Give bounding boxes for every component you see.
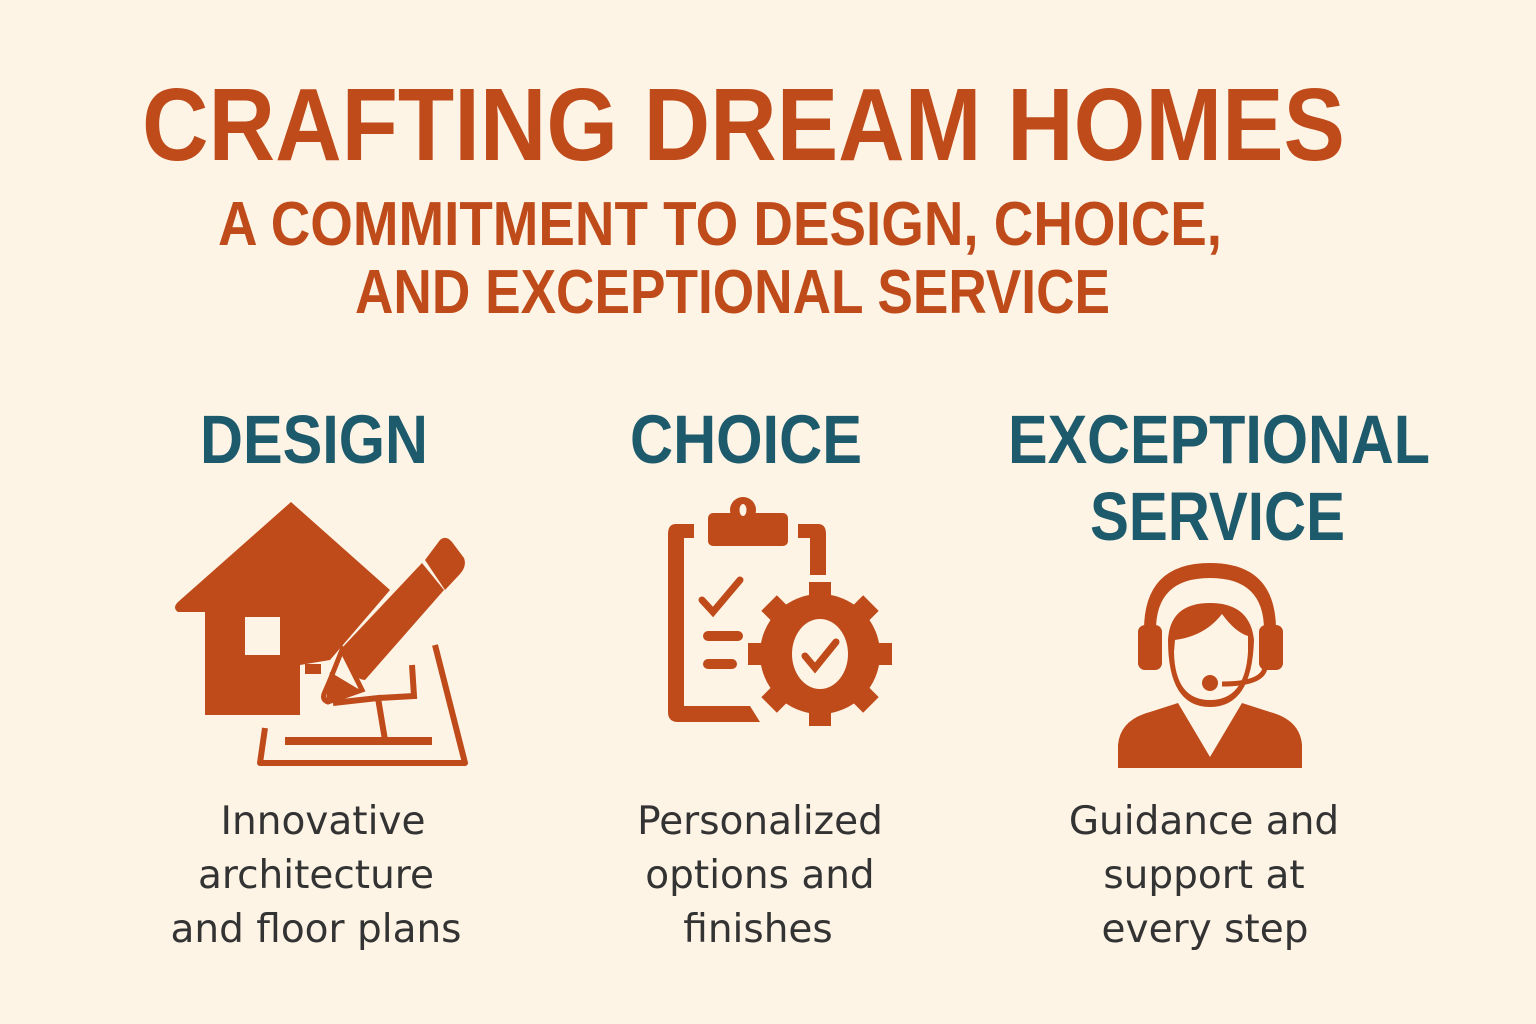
text: service description: support at — [1103, 853, 1305, 898]
panel: choice — [630, 401, 892, 952]
text: choice description: Personalized — [637, 799, 883, 844]
icon: headset support person — [1118, 563, 1302, 768]
heading: exceptional service: SERVICE — [1090, 478, 1345, 555]
text: service description — [1069, 799, 1339, 952]
icon: clipboard with gear — [668, 497, 892, 726]
text: service description: every step — [1102, 907, 1308, 952]
subtitle: A COMMITMENT TO DESIGN, CHOICE, — [218, 190, 1222, 259]
icon: house with pencil and plan — [175, 502, 465, 763]
subtitle — [218, 190, 1222, 327]
text: design description — [170, 799, 462, 952]
text: service description: Guidance and — [1069, 799, 1339, 844]
text: choice description: options and — [645, 853, 875, 898]
heading: exceptional service — [1008, 401, 1430, 555]
heading: exceptional service: EXCEPTIONAL — [1008, 401, 1430, 478]
text: choice description — [637, 799, 883, 952]
text: design description: architecture — [198, 853, 434, 898]
panel: design — [170, 401, 465, 952]
title: CRAFTING DREAM HOMES — [142, 67, 1345, 182]
text: design description: Innovative — [221, 799, 425, 844]
panel: exceptional service — [1008, 401, 1430, 952]
heading: choice: CHOICE — [630, 401, 862, 478]
text: design description: and floor plans — [170, 907, 462, 952]
subtitle: AND EXCEPTIONAL SERVICE — [355, 258, 1110, 327]
heading: design: DESIGN — [200, 401, 428, 478]
text: choice description: finishes — [683, 907, 833, 952]
